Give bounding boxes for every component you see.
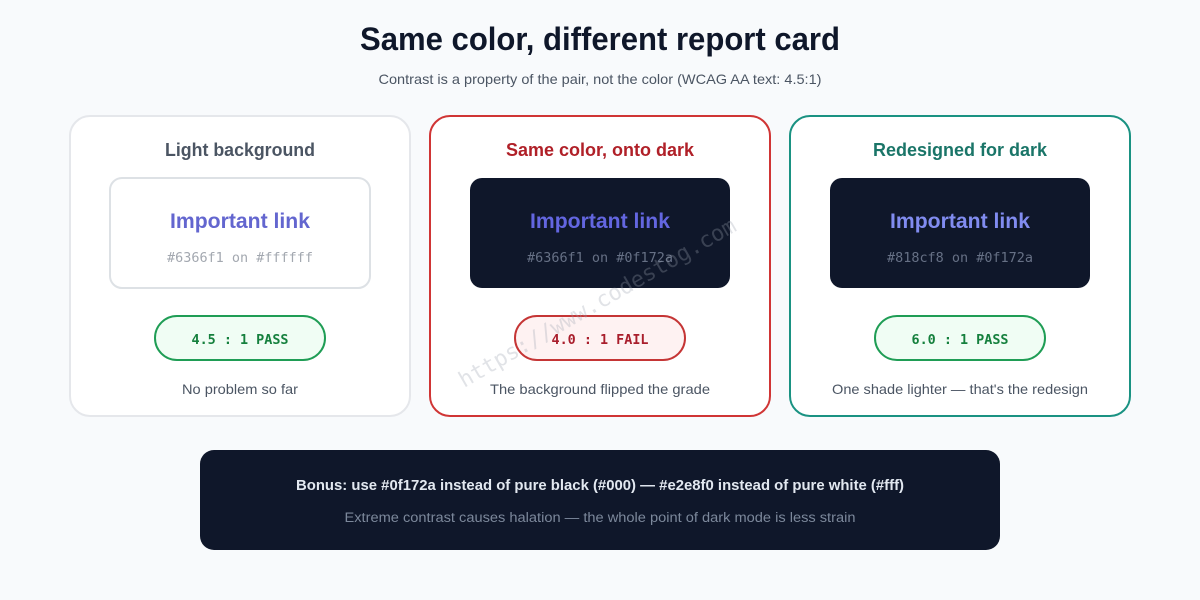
badge: pass 4.5 xyxy=(155,316,325,360)
heading: same color: Same color, onto dark xyxy=(506,140,695,160)
badge: fail 4.0: 4.0 : 1 FAIL xyxy=(552,332,648,348)
panel: same color onto dark xyxy=(430,116,770,416)
title: Same color, different report card xyxy=(360,21,840,57)
badge: fail 4.0 xyxy=(515,316,685,360)
caption: The background flipped the grade xyxy=(490,381,710,397)
callout: bonus tip: Extreme contrast causes halation — the whole point of dark mode is less strain xyxy=(344,510,856,525)
heading: redesigned: Redesigned for dark xyxy=(873,140,1048,160)
callout: bonus tip xyxy=(200,450,1000,550)
panel: redesigned for dark xyxy=(790,116,1130,416)
badge: pass 6.0: 6.0 : 1 PASS xyxy=(912,332,1008,348)
swatch: dark pass xyxy=(830,178,1090,288)
swatch: dark pass: #818cf8 on #0f172a xyxy=(887,250,1033,266)
swatch: light: Important link xyxy=(170,210,310,233)
swatch: light: #6366f1 on #ffffff xyxy=(167,250,313,266)
watermark: https://www.codestog.com xyxy=(455,214,741,393)
caption: One shade lighter — that's the redesign xyxy=(832,381,1088,397)
caption: No problem so far xyxy=(182,381,298,397)
panel: light background xyxy=(70,116,410,416)
badge: pass 4.5: 4.5 : 1 PASS xyxy=(192,332,288,348)
swatch: dark pass: Important link xyxy=(890,210,1030,233)
swatch: light xyxy=(110,178,370,288)
swatch: dark fail xyxy=(470,178,730,288)
swatch: dark fail: Important link xyxy=(530,210,670,233)
badge: pass 6.0 xyxy=(875,316,1045,360)
swatch: dark fail: #6366f1 on #0f172a xyxy=(527,250,673,266)
subtitle: Contrast is a property of the pair, not the color (WCAG AA text: 4.5:1) xyxy=(378,71,822,87)
callout: bonus tip: Bonus: use #0f172a instead of pure black (#000) — #e2e8f0 instead of pure white (#fff) xyxy=(296,478,904,494)
heading: light background: Light background xyxy=(165,140,315,160)
